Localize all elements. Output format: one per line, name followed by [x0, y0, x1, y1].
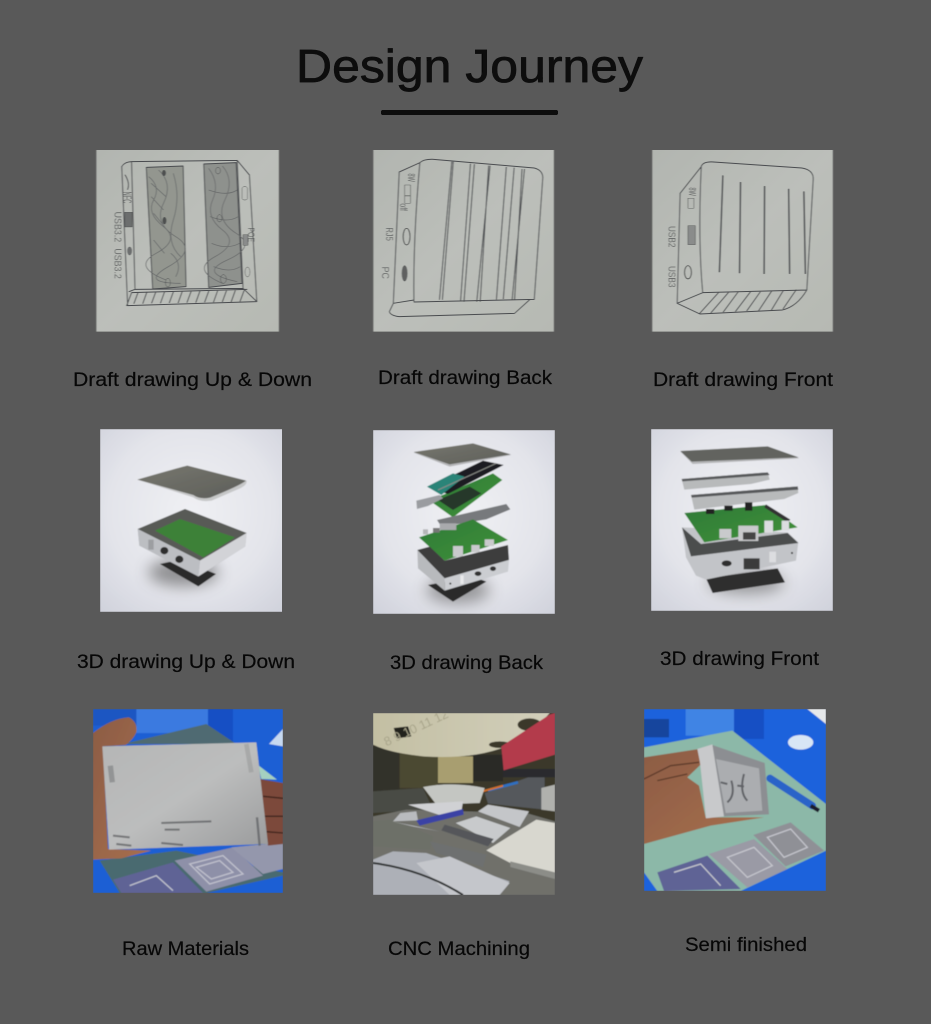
sketch: port labels: USB3.2: [111, 248, 123, 279]
semi finished part: [697, 744, 769, 818]
raw aluminium plate: [102, 742, 268, 850]
workpieces: [391, 801, 555, 879]
sketch: port labels: [111, 175, 256, 279]
title: Design Journey: [296, 40, 643, 92]
sketch: port labels: POE: [246, 227, 256, 242]
red guard: [501, 713, 555, 770]
label: draft drawing up and down: Draft drawing Up & Down: [73, 369, 312, 391]
panel: 3D drawing up and down: [100, 429, 283, 612]
sketch: front ports: 8W: [686, 187, 699, 196]
lid: [414, 443, 511, 467]
panel: semi finished photo: [644, 709, 826, 891]
coolant nozzles: [479, 782, 518, 792]
enclosure: [682, 527, 798, 580]
floor shadow: [148, 558, 218, 586]
lower bracket: [691, 486, 798, 510]
sketch: back ports: [379, 173, 418, 281]
sketch: right vent panel: [204, 163, 245, 287]
lid: [137, 466, 247, 501]
upper bracket: [682, 472, 770, 490]
enclosure: [138, 509, 247, 576]
label: CNC machining: CNC Machining: [388, 938, 530, 960]
blue tray: [644, 709, 826, 750]
label: draft drawing front: Draft drawing Front: [653, 369, 834, 391]
title underline: [381, 110, 558, 115]
circuit board: [684, 502, 798, 542]
hand: [644, 749, 764, 844]
lower bracket: [437, 504, 510, 527]
panel: CNC machining photo: [373, 707, 555, 895]
sketch: enclosure outline back: [389, 159, 543, 317]
panel: draft drawing up and down: [96, 150, 279, 332]
machine table: [373, 810, 555, 895]
enclosure: [417, 545, 509, 591]
green mat: [100, 724, 283, 893]
panel: 3D drawing back: [373, 430, 555, 614]
tool carousel: 8 9 10 11 12: [382, 707, 451, 749]
panel: raw materials photo: [93, 709, 283, 893]
foreground slab: [373, 851, 510, 895]
lower circuit board: [419, 519, 508, 561]
label: draft drawing back: Draft drawing Back: [378, 367, 552, 389]
panel: 3D drawing front: [651, 429, 833, 611]
sketch: back ports: off: [398, 203, 410, 211]
upper bracket: [416, 495, 443, 509]
sketch: port labels: USB3.2: [111, 212, 123, 242]
sketch: back ports: 8W: [406, 173, 418, 182]
sketch: port labels: NFC: [119, 192, 133, 203]
floor shadow: [706, 568, 785, 594]
lid: [680, 446, 799, 464]
tool carousel: [373, 707, 550, 757]
floor shadow: [426, 577, 490, 603]
sketch: back ports: PC: [379, 267, 391, 279]
sketch: grooves: [439, 162, 524, 301]
sketch: back ports: RJ5: [384, 227, 395, 241]
sketch: front ports: [666, 187, 699, 287]
label: 3D drawing up and down: 3D drawing Up & Down: [77, 651, 295, 673]
sketch: front ports: USB3: [666, 266, 677, 287]
label: semi finished: Semi finished: [685, 934, 807, 956]
machined parts: [657, 822, 824, 891]
sketch: left vent panel: [146, 166, 186, 289]
sketch: hatched side: [134, 291, 244, 303]
sketch: front ports: USB2: [666, 226, 677, 247]
machine background: [373, 746, 555, 813]
label: raw materials: Raw Materials: [122, 938, 249, 960]
machined parts: [113, 842, 283, 893]
chip mass: [373, 820, 433, 850]
panel: draft drawing front: [652, 150, 833, 332]
sketch: enclosure outline front: [677, 162, 813, 314]
green mat: [644, 731, 826, 891]
blue tray: [93, 709, 283, 746]
row: draft drawings: [96, 150, 833, 332]
sketch: vent slits: [719, 176, 805, 273]
hand: [93, 717, 283, 860]
label: 3D drawing back: 3D drawing Back: [390, 652, 543, 674]
coolant spray: [423, 784, 485, 805]
sketch: enclosure outline: [122, 160, 257, 306]
upper circuit board: [427, 461, 504, 517]
blue screwdriver: [770, 778, 819, 811]
panel: draft drawing back: [373, 150, 554, 332]
label: 3D drawing front: 3D drawing Front: [660, 648, 820, 670]
sketch: side hatching: [700, 290, 796, 313]
